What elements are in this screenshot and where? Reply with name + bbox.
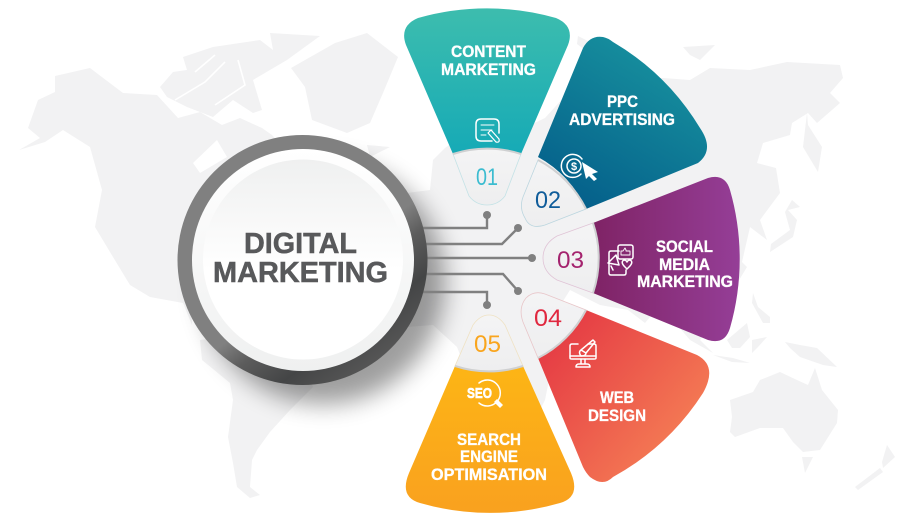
number cap 05: 05 (474, 331, 501, 358)
map: japan (770, 200, 800, 252)
map: borneo (727, 323, 750, 348)
label ppc advertising: PPC (607, 93, 638, 111)
map: south america (200, 335, 313, 498)
icon: seo magnifier (467, 380, 503, 408)
label social media marketing (637, 238, 733, 291)
map: arctic islands (160, 33, 320, 117)
label social media marketing: MARKETING (637, 273, 733, 291)
central title (213, 228, 388, 289)
icon: document with pencil (476, 119, 499, 142)
connector 03 (415, 254, 536, 262)
number cap 05 (455, 315, 523, 371)
label web design: DESIGN (588, 407, 646, 425)
central circle (178, 135, 428, 385)
label search engine optimisation: OPTIMISATION (431, 466, 547, 484)
connector lines (415, 211, 536, 309)
map: australia (730, 368, 838, 452)
map: java (713, 355, 750, 363)
map: novaya zemlya (683, 45, 715, 60)
map: new zealand south (855, 468, 883, 490)
icon: social phone with megaphone and like (608, 245, 633, 275)
map: kamchatka (803, 113, 822, 172)
label ppc advertising: ADVERTISING (569, 111, 675, 129)
icon: monitor with brush (570, 340, 596, 367)
map: greenland (291, 33, 398, 133)
label content marketing: MARKETING (441, 61, 536, 79)
label social media marketing: MEDIA (659, 256, 710, 274)
connector 05 (415, 292, 491, 309)
panel: 02 ppc advertising (521, 37, 707, 226)
connector 02 (415, 224, 522, 244)
panel: 04 web design (521, 293, 709, 482)
number cap 03: 03 (557, 247, 584, 274)
label web design (588, 389, 646, 425)
map: channels through the arctic islands (175, 55, 245, 105)
map: iceland (367, 145, 390, 157)
label web design: WEB (600, 389, 634, 407)
map: eurasia and africa (390, 62, 843, 460)
panel: 01 content marketing (404, 8, 570, 205)
connector 01 (415, 211, 491, 228)
map: sulawesi (752, 337, 767, 353)
label search engine optimisation (431, 431, 547, 484)
central circle drop shadow (201, 160, 445, 404)
number cap 02 (521, 160, 586, 226)
map: north america (19, 68, 300, 325)
icon: dollar coin and cursor (561, 154, 598, 181)
map: northern archipelago (577, 36, 590, 50)
number cap 01: 01 (476, 164, 498, 191)
icon: dollar coin and cursor: $ (571, 161, 577, 173)
map: new zealand north (882, 445, 895, 468)
central title: MARKETING (213, 257, 388, 289)
label search engine optimisation: SEARCH (457, 431, 521, 449)
icon: seo magnifier: SEO (467, 385, 492, 402)
label content marketing (441, 43, 536, 79)
label social media marketing: SOCIAL (656, 238, 713, 256)
connector 04 (415, 274, 522, 295)
map: philippines (752, 293, 770, 323)
label search engine optimisation: ENGINE (460, 448, 518, 466)
map: new guinea (785, 342, 837, 367)
number cap 04 (521, 293, 586, 358)
central title: DIGITAL (244, 228, 357, 260)
label content marketing: CONTENT (451, 43, 526, 61)
number cap 04: 04 (534, 305, 562, 332)
label ppc advertising (569, 93, 675, 129)
panel: 05 search engine optimisation (406, 315, 574, 513)
map: tasmania (802, 457, 813, 473)
number cap 02: 02 (535, 187, 561, 214)
number cap 01 (453, 149, 521, 205)
number cap 03 (543, 223, 599, 293)
panel: 03 social media marketing (543, 177, 740, 341)
